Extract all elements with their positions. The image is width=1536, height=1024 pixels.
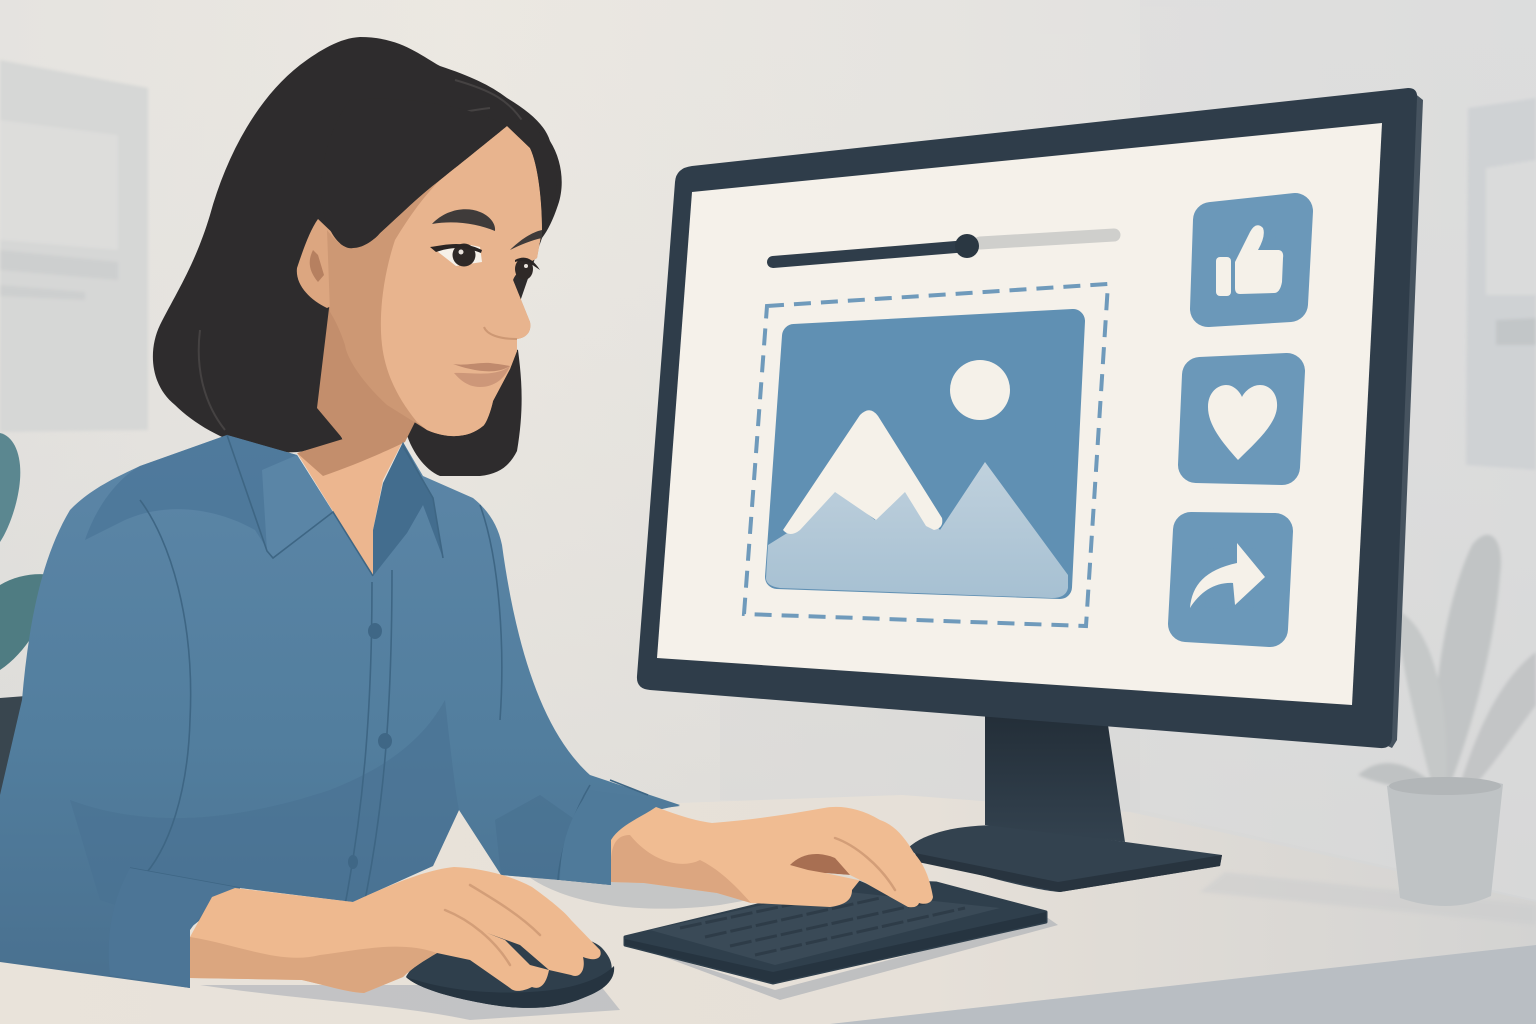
shirt buttons	[348, 623, 392, 869]
eyebrows	[432, 209, 542, 250]
sun	[950, 360, 1010, 420]
icon: share arrow	[1186, 530, 1275, 629]
left plant	[0, 433, 57, 670]
face	[327, 126, 542, 436]
mouse	[406, 931, 614, 1008]
face light area	[381, 126, 542, 436]
hair front	[321, 99, 507, 248]
shoulder shade	[85, 435, 333, 558]
dashed crop frame	[744, 284, 1108, 626]
eye left	[430, 244, 482, 266]
neck	[297, 300, 420, 576]
icon: heart	[1196, 371, 1287, 467]
right wall poster	[1466, 98, 1536, 470]
collar	[262, 442, 443, 576]
plant pot	[1387, 777, 1503, 906]
hand on mouse	[190, 867, 601, 993]
left cuff	[109, 868, 240, 988]
left wall poster	[0, 60, 148, 432]
shirt torso and sleeves	[0, 435, 680, 988]
woman	[0, 37, 680, 988]
left collar flap	[262, 455, 333, 558]
monitor stand	[908, 715, 1222, 892]
keyboard	[625, 880, 1046, 983]
lips	[453, 363, 510, 387]
monitor	[637, 88, 1423, 748]
right collar flap	[373, 442, 443, 576]
eye right	[515, 258, 540, 280]
shirt seams	[120, 435, 648, 928]
office chair	[0, 696, 26, 800]
icon: thumbs up	[1208, 211, 1295, 309]
monitor screen	[657, 123, 1382, 705]
mountains	[766, 410, 1068, 598]
hair highlight strands	[199, 80, 525, 430]
picture placeholder	[766, 321, 1073, 598]
right cuff	[560, 790, 680, 885]
desk shadows	[200, 870, 1536, 1020]
ear	[297, 219, 345, 308]
right plant	[1358, 535, 1536, 790]
slider	[773, 234, 1114, 262]
nose shade	[484, 327, 517, 339]
hair back	[153, 37, 562, 476]
shirt shading	[70, 700, 459, 928]
hand on keyboard	[611, 807, 933, 907]
desk	[0, 795, 1536, 1024]
